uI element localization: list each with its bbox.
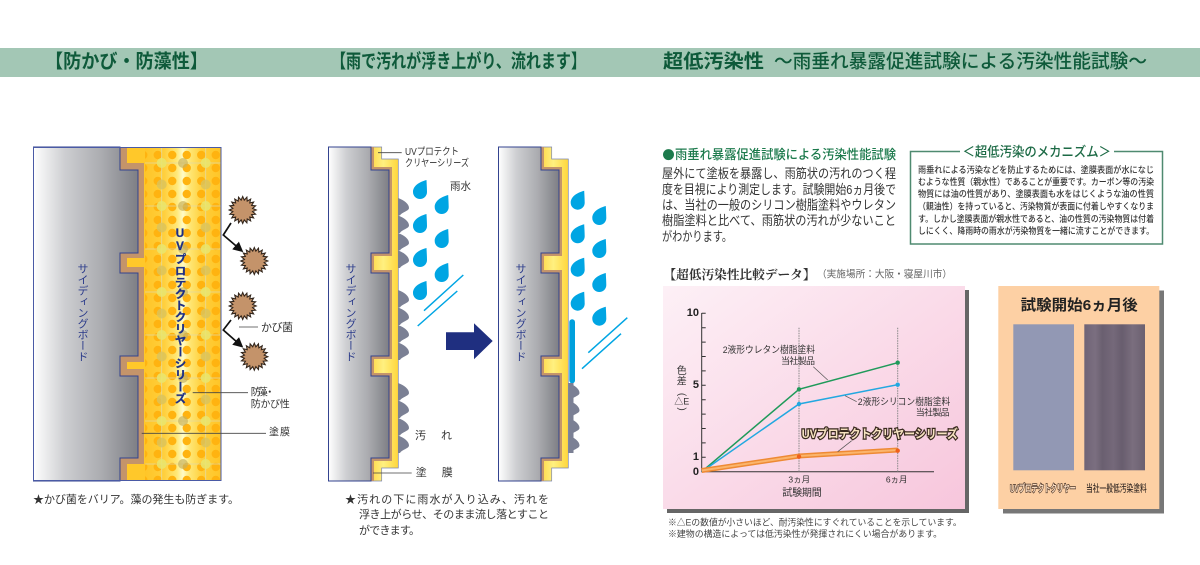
board label: サイディングボード (344, 263, 356, 362)
labels (373, 146, 472, 479)
chart labels: 2液形ウレタン樹脂塗料 (723, 344, 815, 356)
photo: UV protect clear (1013, 324, 1074, 470)
y axis label: ( (676, 393, 687, 397)
labels: UVプロテクト (405, 146, 459, 158)
axes (702, 313, 934, 472)
siding board (498, 147, 559, 481)
coating (371, 147, 398, 481)
water film (569, 319, 575, 383)
dirt (568, 383, 580, 453)
panel: mechanism (910, 144, 1162, 244)
labels: 塗 膜 (416, 466, 453, 479)
panel: rain before (328, 146, 472, 481)
labels: クリヤーシリーズ (405, 156, 469, 170)
text block: test description: 屋外にて塗板を暴露し、雨筋状の汚れのつく程 (662, 166, 896, 181)
axis numbers: 1 (693, 451, 699, 463)
labels: 防藻・ (251, 386, 275, 398)
panel: anti-mold diagram (33, 147, 293, 506)
caption: rain: 浮き上がらせ、そのまま流し落とすこと (359, 507, 549, 521)
chart labels: 試験期間 (782, 486, 822, 499)
photo label: UV: UVプロテクトクリヤー (1010, 483, 1076, 495)
axis numbers (687, 307, 699, 478)
mechanism text: しにくく、降雨時の雨水が汚染物質を一緒に流すことができます。 (918, 225, 1154, 236)
board label: サイディングボード (514, 263, 526, 362)
dirt (398, 198, 409, 453)
coating (541, 147, 568, 481)
line: silicone (702, 382, 900, 472)
caption: rain (345, 492, 549, 537)
heading: super low contamination: 超低汚染性 (663, 50, 764, 72)
board label: サイディングボード (76, 263, 88, 362)
labels (142, 321, 293, 438)
section heading: accelerated test: 雨垂れ暴露促進試験による汚染性能試験 (675, 147, 896, 162)
y axis label (674, 365, 689, 411)
icon: mold spores (229, 196, 268, 370)
panel: rain after (498, 147, 627, 481)
location note: （実施場所：大阪・寝屋川市） (817, 268, 952, 280)
mechanism text: （親油性）を持っていると、汚染物質が表面に付着しやすくなりま (918, 200, 1154, 212)
footnotes: ※△Eの数値が小さいほど、耐汚染性にすぐれていることを示しています。 (668, 516, 962, 527)
chart labels: 2液形シリコン樹脂塗料 (858, 396, 951, 408)
photo: general paint (1084, 324, 1145, 470)
siding board (328, 147, 389, 481)
chart labels: 6ヵ月 (886, 474, 908, 484)
rain lines (418, 275, 463, 326)
coating layers (120, 147, 221, 481)
header band (0, 48, 1200, 77)
heading: anti-mold: 【防かび・防藻性】 (45, 50, 208, 72)
photo panel title: 試験開始6ヵ月後 (1021, 296, 1138, 314)
photo panel (998, 286, 1164, 514)
text block: test description: 樹脂塗料と比べて、雨筋状の汚れが少ないこと (662, 213, 896, 228)
product label: UVプロテクトクリヤーシリーズ (174, 227, 186, 404)
heading: comparison data: 【超低汚染性比較データ】 (664, 267, 816, 282)
arrows: bounce off (223, 223, 242, 346)
caption: ★かび菌をバリア。藻の発生も防ぎます。 (33, 492, 239, 506)
labels: かび菌 (261, 321, 293, 334)
chart labels: UVプロテクトクリヤーシリーズ (802, 426, 958, 441)
labels: 雨水 (450, 181, 472, 193)
mechanism text: 物質には油の性質があり、塗膜表面も水をはじくような油の性質 (918, 188, 1154, 199)
footnotes: ※建物の構造によっては低汚染性が発揮されにくい場合があります。 (668, 528, 942, 539)
footnotes (668, 516, 962, 539)
text block: test description (662, 166, 896, 244)
arrow: before to after (446, 323, 493, 359)
line: UV protect (702, 448, 900, 470)
labels: 防かび性 (251, 398, 290, 410)
axis numbers: 10 (687, 307, 699, 319)
caption: rain: ★汚れの下に雨水が入り込み、汚れを (345, 492, 549, 506)
icon: rain drops (571, 191, 606, 326)
y axis label: ) (676, 407, 687, 411)
chart labels: 当社製品 (781, 355, 815, 366)
mechanism text: す。しかし塗膜表面が親水性であると、油の性質の汚染物質は付着 (918, 213, 1154, 224)
labels: 塗膜 (269, 426, 290, 438)
mechanism text (918, 164, 1154, 236)
icon: rain drops (413, 180, 449, 300)
axis numbers: 0 (693, 466, 699, 478)
y axis label: △E (674, 396, 689, 406)
chart labels: 3ヵ月 (788, 474, 810, 484)
chart labels: 当社製品 (916, 407, 950, 418)
y axis label: 色 (677, 365, 687, 377)
mechanism title: ＜超低汚染のメカニズム＞ (962, 144, 1111, 160)
axis numbers: 5 (693, 379, 699, 391)
y axis label: 差 (677, 374, 687, 388)
mechanism text: むような性質（親水性）であることが重要です。カーボン等の汚染 (918, 176, 1154, 187)
caption: rain: ができます。 (359, 523, 420, 537)
mechanism text: 雨垂れによる汚染などを防止するためには、塗膜表面が水になじ (918, 164, 1154, 175)
text block: test description: がわかります。 (662, 229, 732, 244)
heading: rain washes dirt: 【雨で汚れが浮き上がり、流れます】 (331, 50, 586, 72)
photo label: general: 当社一般低汚染塗料 (1086, 482, 1147, 495)
text block: test description: 度を目視により測定します。試験開始6ヵ月後で (662, 182, 896, 197)
siding board (34, 147, 138, 481)
chart labels (723, 344, 958, 499)
heading: test subtitle: ～雨垂れ暴露促進試験による汚染性能試験～ (774, 50, 1147, 72)
chart panel (663, 286, 969, 513)
rain lines (582, 318, 627, 369)
line: urethane (702, 360, 900, 472)
labels: 汚 れ (415, 429, 452, 442)
text block: test description: は、当社の一般のシリコン樹脂塗料やウレタン (662, 198, 896, 212)
